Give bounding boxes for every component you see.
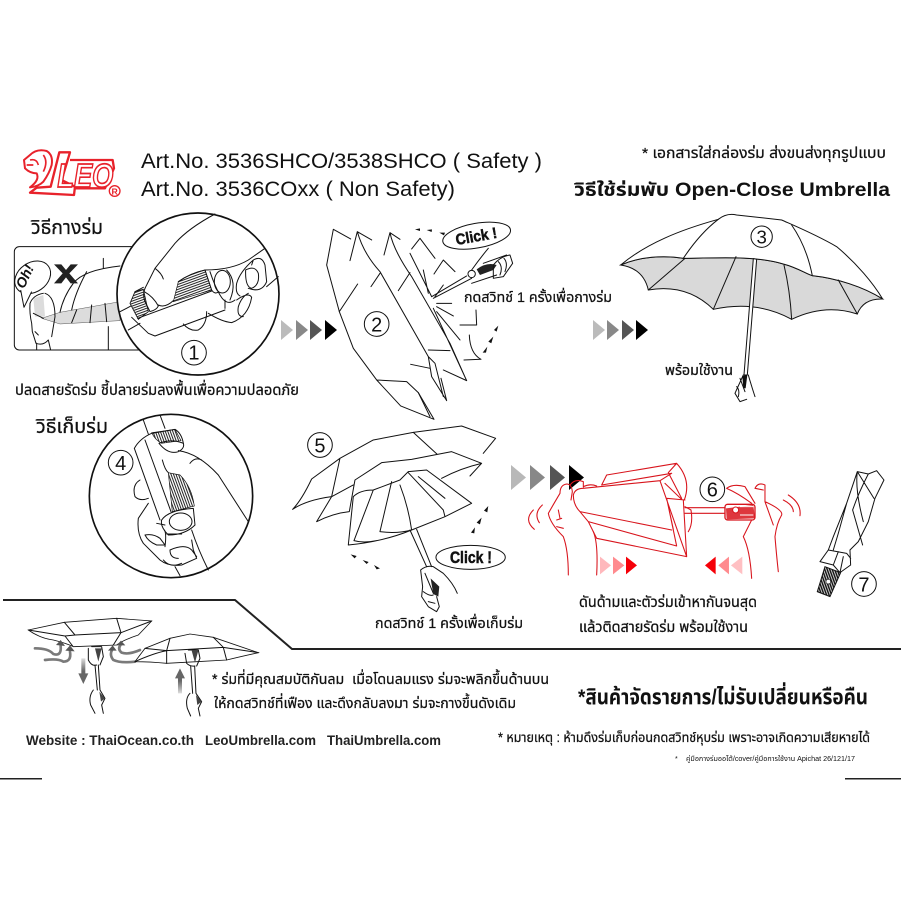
illustration: open umbrella, step 3: 3 — [756, 227, 767, 248]
heading: article numbers: Art.No. 3536COxx ( Non Safety) — [141, 178, 455, 201]
footnote: file reference: * — [675, 756, 678, 763]
caption: step 6: แล้วติดสายรัดร่ม พร้อมใช้งาน — [579, 618, 748, 636]
crop mark: bottom right — [845, 778, 901, 780]
illustration: closed umbrella, step 7: 7 — [858, 574, 870, 596]
caption: step 1: ปลดสายรัดร่ม ชี้ปลายร่มลงพื้นเพื่อความปลอดภัย — [15, 379, 299, 399]
illustration: wind-proof inverted umbrella — [28, 618, 258, 716]
arrows: step 5 to 6 — [511, 465, 584, 490]
heading: article numbers — [141, 150, 542, 201]
arrows: step 1 to 2 — [281, 320, 337, 340]
logo: LEO lion: R — [112, 186, 119, 196]
illustration: umbrella opening, step 2: 2 — [371, 314, 382, 336]
divider: stepped rule — [3, 600, 901, 649]
caption: ready to use: พร้อมใช้งาน — [665, 363, 733, 379]
illustration: umbrella closing, step 5: Click ! — [450, 548, 492, 567]
crop mark: bottom left — [0, 778, 42, 780]
caption: step 5: กดสวิทช์ 1 ครั้งเพื่อเก็บร่ม — [375, 613, 523, 631]
footer: website: Website : ThaiOcean.co.th — [26, 733, 194, 748]
heading: how to close: วิธีเก็บร่ม — [35, 415, 108, 438]
arrows: step 2 to 3 — [593, 320, 648, 340]
icon: magnified hand pressing open button: 1 — [188, 343, 200, 365]
heading: article numbers: Art.No. 3536SHCO/3538SHCO ( Safety ) — [141, 150, 542, 173]
illustration: red hands pushing umbrella, step 6: 6 — [707, 480, 718, 502]
title: how to use: วิธีใช้ร่มพับ Open-Close Umbrella — [573, 179, 890, 201]
heading: no exchange notice: *สินค้าจัดรายการ/ไม่รับเปลี่ยนหรือคืน — [578, 682, 868, 709]
caption: step 2: กดสวิทช์ 1 ครั้งเพื่อกางร่ม — [464, 287, 612, 305]
note: document in umbrella box: * เอกสารใส่กล่องร่ม ส่งขนส่งทุกรูปแบบ — [642, 144, 886, 162]
illustration: umbrella opening, step 2 — [327, 218, 513, 419]
caption: step 6: ดันด้ามและตัวร่มเข้าหากันจนสุด — [579, 593, 757, 611]
illustration: red hands pushing umbrella, step 6 — [529, 463, 800, 578]
illustration: closed umbrella, step 7 — [817, 471, 884, 597]
illustration: umbrella closing, step 5: 5 — [314, 435, 326, 457]
note: warning: * หมายเหตุ : ห้ามดึงร่มเก็บก่อนกดสวิทช์หุบร่ม เพราะอาจเกิดความเสียหายได้ — [498, 729, 870, 746]
note: wind-proof feature: ให้กดสวิทช์ที่เฟือง และดึงกลับลงมา ร่มจะกางขึ้นดังเดิม — [214, 693, 516, 712]
caption: step 6 — [579, 593, 757, 636]
heading: how to open: วิธีกางร่ม — [30, 216, 103, 239]
illustration: umbrella closing, step 5 — [293, 426, 505, 612]
warning box: do not point at face: Oh! — [12, 262, 37, 291]
footer: website: ThaiUmbrella.com — [327, 733, 441, 748]
footer: website: LeoUmbrella.com — [205, 733, 316, 748]
footnote: file reference: คู่มือกางร่มออโต้/cover/คู่มือการใช้งาน Apichat 26/121/17 — [686, 754, 855, 763]
icon: magnified hand pressing close button, step 4 — [89, 414, 253, 578]
note: wind-proof feature: * ร่มที่มีคุณสมบัติกันลม เมื่อโดนลมแรง ร่มจะพลิกขึ้นด้านบน — [212, 669, 549, 688]
illustration: open umbrella, step 3 — [621, 214, 883, 402]
icon: magnified hand pressing open button — [117, 213, 279, 375]
logo: LEO lion — [24, 150, 120, 196]
note: wind-proof feature — [212, 669, 549, 712]
icon: magnified hand pressing close button, step 4: 4 — [115, 453, 126, 475]
illustration: umbrella opening, step 2: Click ! — [454, 225, 498, 249]
footer: website — [26, 733, 441, 748]
logo: LEO lion: LEO — [57, 158, 113, 195]
warning box: do not point at face — [8, 247, 148, 350]
